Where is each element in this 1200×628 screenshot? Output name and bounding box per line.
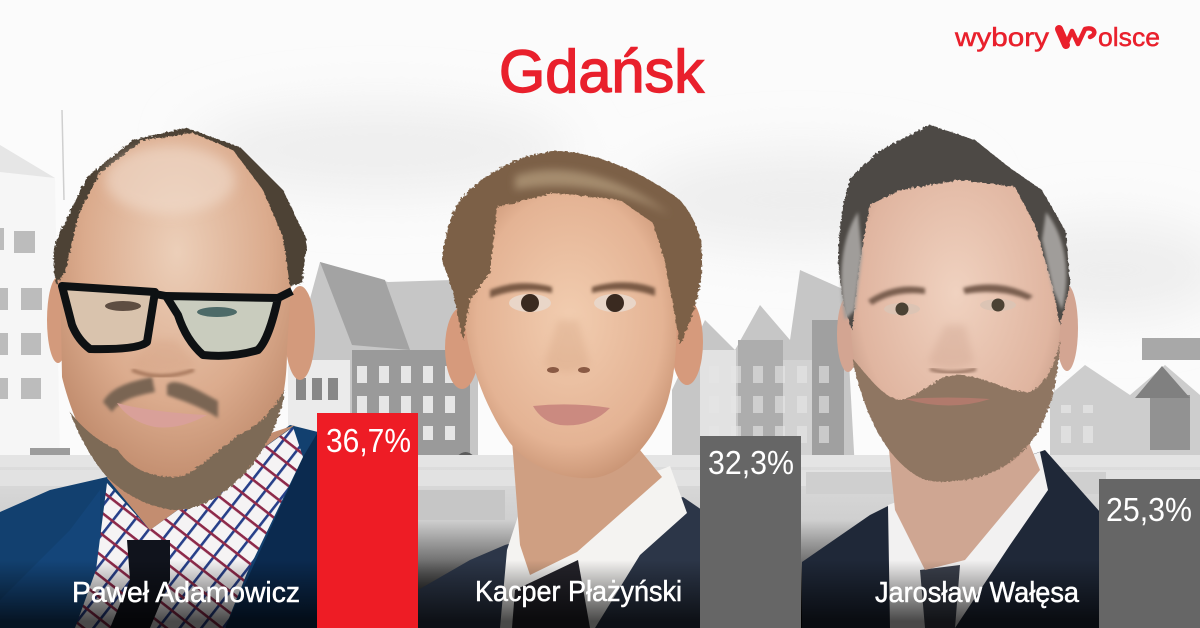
- suit: [418, 497, 702, 628]
- title: Gdańsk: [499, 38, 705, 105]
- neck: [107, 425, 295, 530]
- brows: [490, 283, 552, 298]
- eyes: [509, 294, 636, 312]
- ears: [837, 285, 1078, 372]
- tie: [110, 540, 170, 628]
- suit: [0, 425, 318, 628]
- beard: [70, 390, 285, 510]
- neck: [888, 440, 1040, 570]
- hair: [838, 125, 1070, 330]
- buildings centre-right: [672, 270, 855, 470]
- portrait: Jarosław Wałęsa: [802, 125, 1100, 628]
- shirt: [75, 427, 303, 628]
- ears: [47, 277, 315, 380]
- brows: [868, 286, 925, 305]
- name: Jarosław Wałęsa: Jarosław Wałęsa: [875, 577, 1080, 609]
- head: [850, 160, 1062, 477]
- value: 25,3%: [1106, 491, 1192, 528]
- value: 32,3%: [708, 444, 794, 481]
- mouth: [905, 398, 990, 406]
- bar: Wałęsa result: [1099, 479, 1200, 628]
- eyes: [105, 301, 141, 311]
- quay and water: [0, 455, 1200, 628]
- logo text: olsce: olsce: [1098, 22, 1160, 52]
- logo: wybory w polsce: [954, 22, 1160, 52]
- buildings centre-left: [288, 262, 484, 472]
- glasses: [62, 286, 292, 356]
- moustache: [103, 377, 218, 418]
- mouth: [533, 404, 610, 425]
- portrait: Paweł Adamowicz: [0, 128, 318, 628]
- forehead highlight: [105, 146, 235, 214]
- hair: [54, 128, 307, 286]
- neck: [512, 440, 662, 575]
- nose: [544, 320, 590, 373]
- ears: [445, 299, 703, 389]
- hair highlight: [515, 170, 670, 215]
- beard: [852, 340, 1060, 481]
- buildings left: [0, 110, 70, 466]
- bar: Płażyński result: [700, 436, 801, 628]
- shirt: [500, 466, 687, 628]
- head: [60, 131, 294, 510]
- hair: [442, 151, 702, 345]
- suit: [802, 450, 1100, 628]
- shirt: [888, 452, 1048, 628]
- tie: [512, 560, 590, 628]
- buildings right: [1050, 338, 1200, 455]
- bottom dark gradient: [0, 520, 1200, 628]
- nose: [130, 340, 196, 376]
- nose: [928, 325, 976, 372]
- eyes: [884, 298, 1016, 316]
- logo text: wybory: wybory: [954, 22, 1049, 52]
- name: Paweł Adamowicz: Paweł Adamowicz: [72, 577, 300, 609]
- portrait: Kacper Płażyński: [418, 151, 703, 628]
- mouth: [117, 403, 207, 428]
- portrait shade over lower photos: [0, 560, 1200, 628]
- value: 36,7%: [326, 422, 411, 459]
- grey temples: [841, 212, 862, 320]
- bar: Adamowicz result: [317, 413, 418, 628]
- logo mark: [1059, 28, 1094, 45]
- head: [463, 190, 677, 478]
- name: Kacper Płażyński: Kacper Płażyński: [475, 576, 682, 608]
- tie: [920, 565, 960, 628]
